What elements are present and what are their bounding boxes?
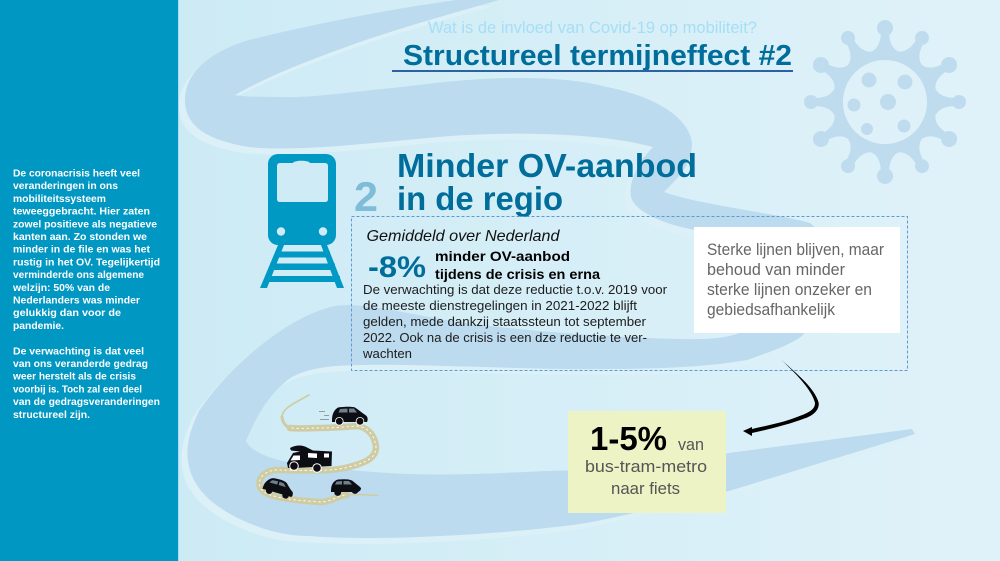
statistic description <box>435 248 600 282</box>
panel paragraph: gelden, mede dankzij staatssteun tot september <box>363 314 647 329</box>
panel subheading: Gemiddeld over Nederland <box>366 228 561 245</box>
callout: white note: sterke lijnen onzeker en <box>707 281 872 299</box>
sidebar intro text: De verwachting is dat veel <box>13 346 144 357</box>
vehicle: car left <box>262 476 296 500</box>
callout: yellow statistic: van <box>678 436 704 454</box>
illustration: road with vehicles <box>260 395 378 502</box>
panel paragraph: wachten <box>362 346 412 361</box>
icon: virus <box>804 20 966 184</box>
section heading: Minder OV-aanbod <box>397 147 697 184</box>
sidebar intro text: zowel positieve als negatieve <box>13 219 157 230</box>
dashed panel <box>352 216 908 370</box>
statistic description: minder OV-aanbod <box>435 248 570 264</box>
sidebar intro text: rustig in het OV. Tegelijkertijd <box>13 257 160 268</box>
callout: white note <box>694 227 900 333</box>
main title: Structureel termijneffect #2 <box>403 40 792 72</box>
subtitle question: Wat is de invloed van Covid-19 op mobiliteit? <box>428 18 757 37</box>
sidebar intro text: veranderingen in ons <box>13 181 118 192</box>
callout: white note: behoud van minder <box>707 261 845 279</box>
speed lines <box>319 412 329 420</box>
sidebar intro text: teweeggebracht. Hier zaten <box>13 207 150 218</box>
sidebar intro text: welzijn: 50% van de <box>12 283 110 294</box>
sidebar intro text <box>12 168 160 421</box>
panel paragraph: De verwachting is dat deze reductie t.o.v. 2019 voor <box>363 282 668 297</box>
callout: yellow statistic: bus-tram-metro <box>585 457 707 476</box>
river <box>185 0 915 538</box>
left sidebar panel <box>0 0 179 561</box>
callout: white note: gebiedsafhankelijk <box>707 301 836 319</box>
callout: yellow statistic <box>568 411 726 513</box>
section heading <box>397 147 697 217</box>
section heading: in de regio <box>397 180 563 217</box>
statistic: -8%: -8% <box>368 251 426 284</box>
arrow <box>743 357 819 436</box>
panel paragraph: 2022. Ook na de crisis is een dze reductie te ver- <box>363 330 647 345</box>
sidebar intro text: mobiliteitssysteem <box>13 194 106 205</box>
statistic description: tijdens de crisis en erna <box>435 266 600 282</box>
river halo <box>179 6 909 544</box>
callout: white note: Sterke lijnen blijven, maar <box>707 241 884 259</box>
callout: yellow statistic: naar fiets <box>611 479 680 498</box>
sidebar intro text: van ons veranderde gedrag <box>13 359 148 370</box>
section number: 2 <box>354 173 378 220</box>
winding road <box>260 395 378 502</box>
sidebar intro text: verminderde ons algemene <box>13 270 144 281</box>
sidebar intro text: kanten aan. Zo stonden we <box>13 232 147 243</box>
vehicle: car top <box>332 407 368 426</box>
sidebar intro text: voorbij is. Toch zal een deel <box>13 384 142 395</box>
panel paragraph <box>362 282 668 361</box>
sidebar intro text: gelukkig dan voor de <box>13 308 121 319</box>
sidebar intro text: Nederlanders was minder <box>13 296 140 306</box>
title underline <box>392 70 793 72</box>
sidebar intro text: structureel zijn. <box>13 410 90 421</box>
sidebar intro text: pandemie. <box>13 321 64 332</box>
vehicle: car right <box>331 479 361 496</box>
callout: yellow statistic: 1-5% <box>590 420 667 457</box>
panel paragraph: de meeste dienstregelingen in 2021-2022 blijft <box>363 298 637 313</box>
sidebar intro text: De coronacrisis heeft veel <box>13 168 140 180</box>
vehicle: camper <box>287 446 332 473</box>
sidebar intro text: van de gedragsveranderingen <box>13 397 160 408</box>
sidebar intro text: minder in de file en was het <box>13 245 151 256</box>
icon: train <box>260 154 344 288</box>
sidebar intro text: weer herstelt als de crisis <box>12 372 136 383</box>
